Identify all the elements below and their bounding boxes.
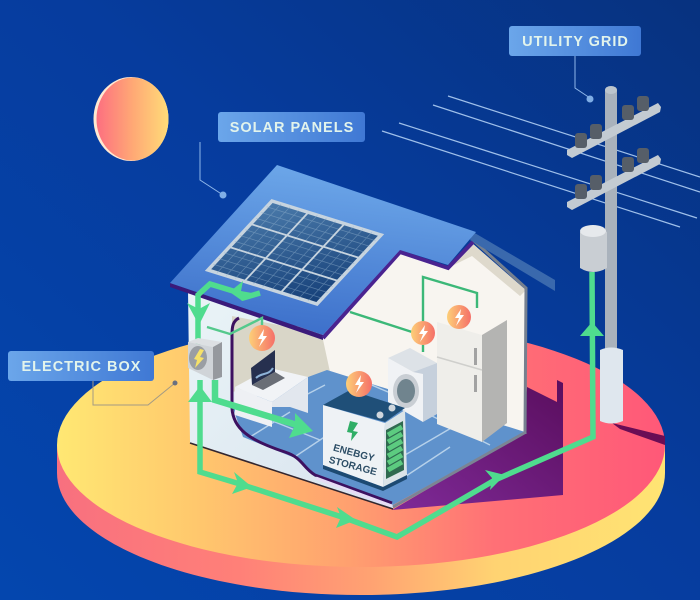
energy storage battery bbox=[323, 390, 407, 491]
icon: sun bbox=[94, 77, 168, 161]
label: solar panels: SOLAR PANELS bbox=[230, 120, 354, 136]
house shadow bbox=[392, 380, 563, 510]
energy bolt markers bbox=[249, 305, 471, 397]
cutaway lavender trim bbox=[316, 478, 392, 506]
pole base bbox=[600, 348, 623, 424]
label: utility grid: UTILITY GRID bbox=[522, 34, 629, 50]
floor edge bbox=[393, 432, 526, 507]
label: electric box: ELECTRIC BOX bbox=[22, 359, 141, 375]
flow arrowheads bbox=[187, 281, 604, 528]
gable beige strip bbox=[448, 243, 526, 296]
laptop bbox=[251, 350, 275, 385]
battery label bbox=[327, 443, 378, 478]
left wall bbox=[188, 290, 393, 509]
label: solar panels bbox=[218, 112, 365, 142]
gable gray edge bbox=[473, 240, 526, 434]
refrigerator bbox=[437, 320, 507, 442]
leader lines bbox=[93, 56, 594, 405]
battery charge indicator bbox=[386, 421, 404, 479]
floor tiles bbox=[232, 370, 525, 505]
desk bbox=[235, 368, 308, 402]
washing machine bbox=[388, 348, 437, 422]
platform disc bbox=[57, 323, 665, 595]
green energy flow lines bbox=[187, 272, 604, 537]
interior back wall, left room bbox=[232, 316, 330, 392]
right wall bbox=[322, 243, 526, 455]
pole shadow bbox=[612, 423, 665, 445]
interior cutaway edge bbox=[232, 318, 392, 503]
battery label: ENEBGY bbox=[332, 443, 376, 464]
label: electric box bbox=[8, 351, 154, 381]
solar panel bbox=[208, 201, 381, 304]
electric box bbox=[188, 338, 222, 380]
utility pole bbox=[382, 86, 700, 424]
house bbox=[188, 240, 526, 509]
cross arms bbox=[567, 103, 661, 158]
insulators bbox=[575, 96, 649, 199]
roof bbox=[170, 165, 555, 340]
meter bbox=[580, 227, 607, 272]
battery bolt bbox=[347, 421, 358, 441]
base line bbox=[190, 443, 393, 509]
battery label: STORAGE bbox=[327, 455, 378, 478]
label: utility grid bbox=[509, 26, 641, 56]
desk with laptop bbox=[235, 350, 308, 427]
power lines bbox=[382, 96, 700, 227]
